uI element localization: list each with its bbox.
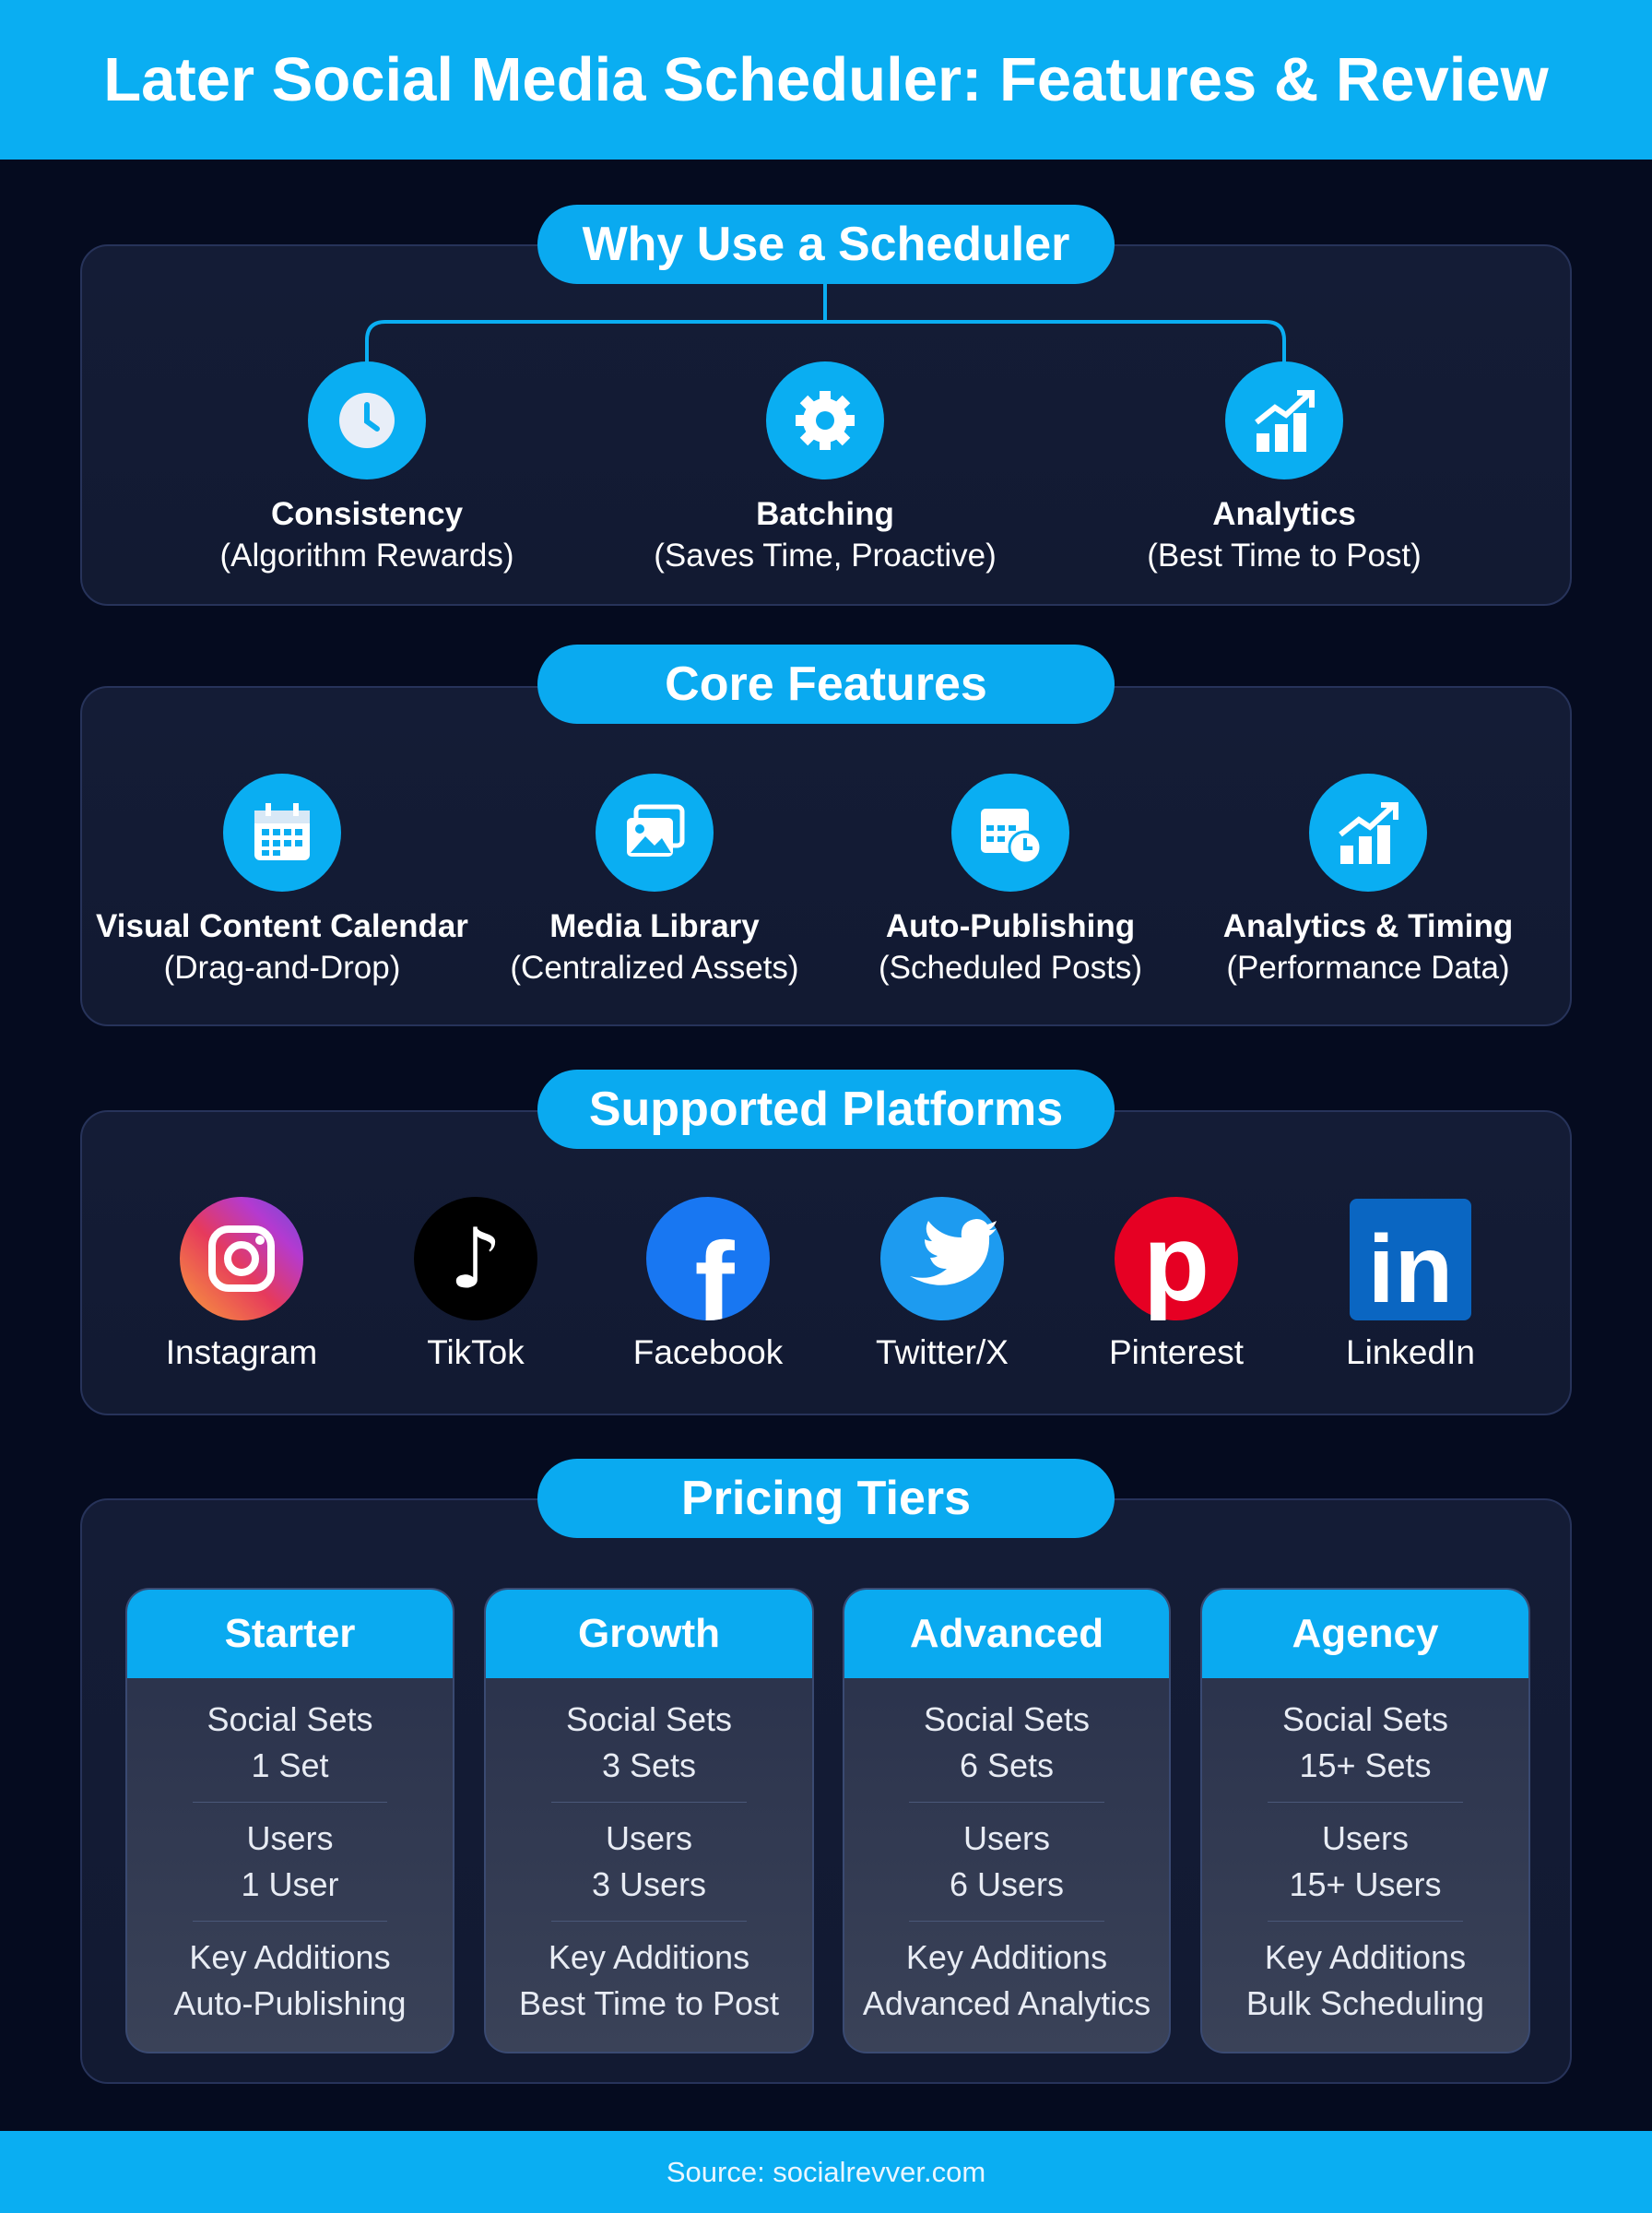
label: auto-publishing: Auto-Publishing [886, 908, 1135, 944]
heading: supported platforms: Supported Platforms [589, 1083, 1063, 1136]
card: starter: Key Additions [189, 1938, 391, 1976]
icon: linkedin [1350, 1199, 1471, 1320]
card: advanced: 6 Sets [960, 1746, 1054, 1784]
card: growth: Social Sets [566, 1700, 732, 1738]
card: agency: 15+ Sets [1299, 1746, 1432, 1784]
heading: supported platforms [537, 1070, 1115, 1149]
footer [0, 2131, 1652, 2213]
icon: analytics [1225, 361, 1343, 479]
card: agency: Bulk Scheduling [1246, 1984, 1484, 2022]
card: agency [1200, 1588, 1530, 2053]
platforms row: Pinterest [1109, 1333, 1244, 1371]
label: batching [654, 496, 997, 574]
card: agency: Social Sets [1282, 1700, 1448, 1738]
header [0, 0, 1652, 160]
icon: tiktok: ♪ [449, 1211, 502, 1308]
label: visual content calendar [96, 908, 468, 986]
label: consistency: (Algorithm Rewards) [220, 538, 513, 574]
platforms row: Twitter/X [876, 1333, 1009, 1371]
label: analytics: (Best Time to Post) [1147, 538, 1422, 574]
card: agency: Users [1322, 1819, 1409, 1857]
label: auto-publishing [879, 908, 1142, 986]
card: starter: Social Sets [206, 1700, 373, 1738]
panel: pricing tiers [80, 1498, 1572, 2084]
icon: pinterest [1115, 1197, 1238, 1320]
platforms row [166, 1197, 1475, 1371]
label: consistency [220, 496, 513, 574]
card: agency: Agency [1292, 1611, 1438, 1656]
panel: why use a scheduler [80, 244, 1572, 606]
panel: core features [80, 686, 1572, 1026]
card: advanced: Advanced Analytics [863, 1984, 1150, 2022]
label: media library [510, 908, 799, 986]
connector lines [365, 284, 1286, 361]
card: growth: Best Time to Post [519, 1984, 779, 2022]
label: batching: Batching [756, 496, 894, 532]
label: visual content calendar: Visual Content Calendar [96, 908, 468, 944]
platform labels [166, 1333, 1475, 1371]
platforms row: TikTok [427, 1333, 525, 1371]
icon: media library [596, 774, 714, 892]
label: media library: (Centralized Assets) [510, 950, 799, 986]
icon: facebook [646, 1197, 770, 1320]
card: starter: Starter [225, 1611, 355, 1656]
card: starter: Auto-Publishing [173, 1984, 407, 2022]
label: analytics & timing: (Performance Data) [1226, 950, 1510, 986]
card: agency: 15+ Users [1289, 1865, 1442, 1903]
label: visual content calendar: (Drag-and-Drop) [164, 950, 400, 986]
icon: analytics timing [1309, 774, 1427, 892]
label: analytics & timing [1223, 908, 1513, 986]
heading: why use a scheduler: Why Use a Scheduler [583, 218, 1069, 271]
icon: auto-publishing [951, 774, 1069, 892]
card: starter: Users [246, 1819, 334, 1857]
platforms row: Instagram [166, 1333, 317, 1371]
card: agency: Key Additions [1265, 1938, 1466, 1976]
card: advanced: Users [963, 1819, 1050, 1857]
card: advanced [843, 1588, 1171, 2053]
icon: tiktok [414, 1197, 537, 1320]
card: starter: 1 User [241, 1865, 339, 1903]
label: consistency: Consistency [271, 496, 463, 532]
heading: why use a scheduler [537, 205, 1115, 284]
label: analytics & timing: Analytics & Timing [1223, 908, 1513, 944]
card: advanced: Social Sets [924, 1700, 1090, 1738]
icon: linkedin: in [1368, 1216, 1453, 1320]
header: Later Social Media Scheduler: Features & Review [103, 45, 1549, 114]
card: growth [484, 1588, 814, 2053]
card: growth: Key Additions [549, 1938, 749, 1976]
footer: Source: socialrevver.com [667, 2156, 985, 2188]
heading: pricing tiers [537, 1459, 1115, 1538]
platforms row: LinkedIn [1346, 1333, 1475, 1371]
label: analytics [1147, 496, 1422, 574]
icon: instagram [180, 1197, 303, 1320]
label: media library: Media Library [549, 908, 760, 944]
panel: supported platforms [80, 1110, 1572, 1415]
heading: core features: Core Features [665, 657, 987, 711]
card: growth: Growth [578, 1611, 720, 1656]
card: growth: Users [606, 1819, 692, 1857]
label: batching: (Saves Time, Proactive) [654, 538, 997, 574]
card: growth: 3 Users [592, 1865, 706, 1903]
icon: clock [308, 361, 426, 479]
card: advanced: 6 Users [950, 1865, 1064, 1903]
card: growth: 3 Sets [602, 1746, 696, 1784]
icon: gear [766, 361, 884, 479]
label: auto-publishing: (Scheduled Posts) [879, 950, 1142, 986]
card: advanced: Key Additions [906, 1938, 1107, 1976]
card: advanced: Advanced [910, 1611, 1103, 1656]
card: starter: 1 Set [251, 1746, 329, 1784]
icon: twitter [880, 1197, 1004, 1320]
label: analytics: Analytics [1212, 496, 1356, 532]
heading: pricing tiers: Pricing Tiers [681, 1472, 971, 1525]
heading: core features [537, 645, 1115, 724]
card: starter [125, 1588, 454, 2053]
platforms row: Facebook [633, 1333, 783, 1371]
icon: calendar [223, 774, 341, 892]
